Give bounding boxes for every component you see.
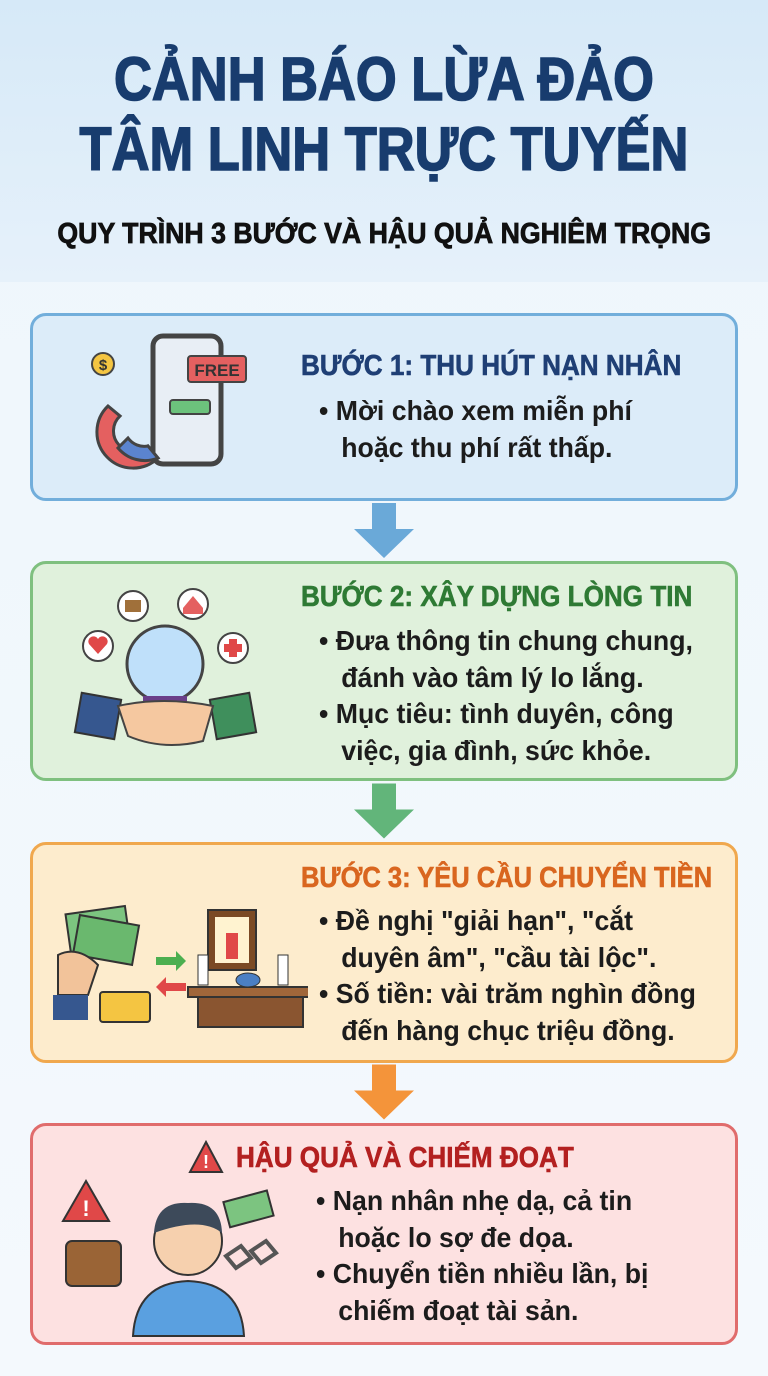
icon: crystal ball handshake: [74, 588, 258, 746]
bullets: hoặc lo sợ đe dọa.: [338, 1222, 574, 1252]
bullets: • Số tiền: vài trăm nghìn đồng: [319, 978, 696, 1009]
panel: step 3: [30, 842, 738, 1063]
icon: magnet and phone: [91, 334, 247, 470]
bullets: [316, 1185, 648, 1326]
icon: worried victim: [61, 1179, 279, 1337]
title: [79, 44, 688, 183]
subtitle: QUY TRÌNH 3 BƯỚC VÀ HẬU QUẢ NGHIÊM TRỌNG: [57, 218, 711, 250]
icon: money and altar: [53, 904, 308, 1028]
bullets: • Nạn nhân nhẹ dạ, cả tin: [316, 1185, 632, 1216]
bullets: • Chuyển tiền nhiều lần, bị: [316, 1258, 648, 1289]
heading with warning icon: !: [203, 1152, 209, 1172]
icon: magnet and phone: $: [99, 357, 108, 374]
bullets: đánh vào tâm lý lo lắng.: [341, 662, 644, 692]
bullets: [319, 395, 633, 463]
bullets: • Mời chào xem miễn phí: [319, 395, 632, 426]
panel: step 1: [30, 313, 738, 501]
title: TÂM LINH TRỰC TUYẾN: [80, 115, 688, 183]
arrow 1: [354, 503, 414, 558]
bullets: [319, 905, 696, 1046]
bullets: • Đưa thông tin chung chung,: [319, 625, 693, 656]
panel: consequences: [30, 1123, 738, 1345]
heading: BƯỚC 1: THU HÚT NẠN NHÂN: [301, 350, 681, 382]
heading with warning icon: HẬU QUẢ VÀ CHIẾM ĐOẠT: [236, 1142, 574, 1174]
heading: BƯỚC 3: YÊU CẦU CHUYỂN TIỀN: [301, 862, 712, 894]
bullets: • Mục tiêu: tình duyên, công: [319, 698, 674, 729]
title: CẢNH BÁO LỪA ĐẢO: [114, 45, 654, 113]
bullets: chiếm đoạt tài sản.: [338, 1294, 578, 1326]
bullets: việc, gia đình, sức khỏe.: [341, 734, 651, 766]
bullets: duyên âm", "cầu tài lộc".: [341, 942, 656, 972]
panel: step 2: [30, 561, 738, 781]
arrow 2: [354, 784, 414, 838]
icon: magnet and phone: FREE: [194, 361, 240, 380]
heading: BƯỚC 2: XÂY DỰNG LÒNG TIN: [301, 581, 692, 613]
bullets: [319, 625, 693, 766]
bullets: hoặc thu phí rất thấp.: [341, 432, 612, 462]
header background: [0, 0, 768, 282]
bullets: • Đề nghị "giải hạn", "cắt: [319, 905, 633, 936]
bullets: đến hàng chục triệu đồng.: [341, 1014, 675, 1046]
icon: worried victim: !: [82, 1196, 90, 1221]
arrow 3: [354, 1064, 414, 1120]
